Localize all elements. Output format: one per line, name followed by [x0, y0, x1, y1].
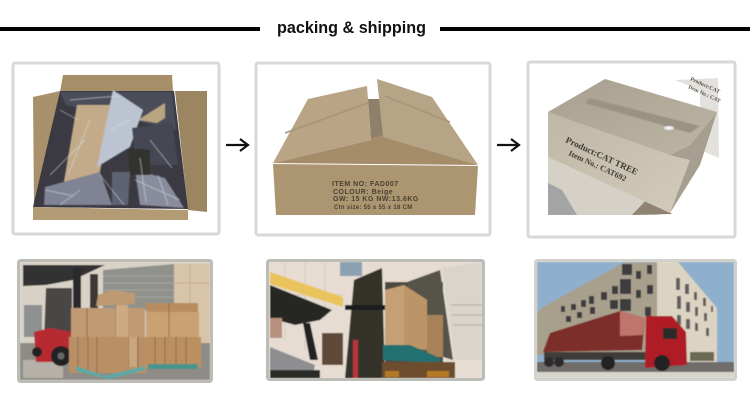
carton label text: COLOUR: Beige [333, 189, 393, 196]
carton label text: GW: 15 KG NW:13.6KG [333, 196, 419, 203]
carton label text: Item No.: CAT692 [567, 149, 628, 183]
panel: stacked carton with product label [528, 62, 735, 237]
carton label text: Product:CAT TREE [564, 135, 640, 177]
heading: packing & shipping [0, 18, 750, 37]
arrow: step one to two [226, 139, 248, 151]
photo: forklift with pallets in warehouse [18, 260, 212, 382]
arrow: step two to three [497, 139, 519, 151]
photo: container truck in front of factory [536, 260, 736, 380]
panel: opened carton with wrapped product [13, 63, 219, 234]
background carton text: Item No.: CAT [687, 84, 722, 105]
carton label text [332, 181, 419, 211]
carton label text: Ctn size: 55 x 55 x 18 CM [334, 205, 413, 211]
background carton text: Product:CAT [689, 76, 721, 95]
carton label text: ITEM NO: FAD007 [332, 181, 399, 188]
heading: packing & shipping: packing & shipping [277, 18, 426, 37]
panel: closed carton [256, 63, 490, 235]
photo: forklift loading container [268, 260, 484, 380]
